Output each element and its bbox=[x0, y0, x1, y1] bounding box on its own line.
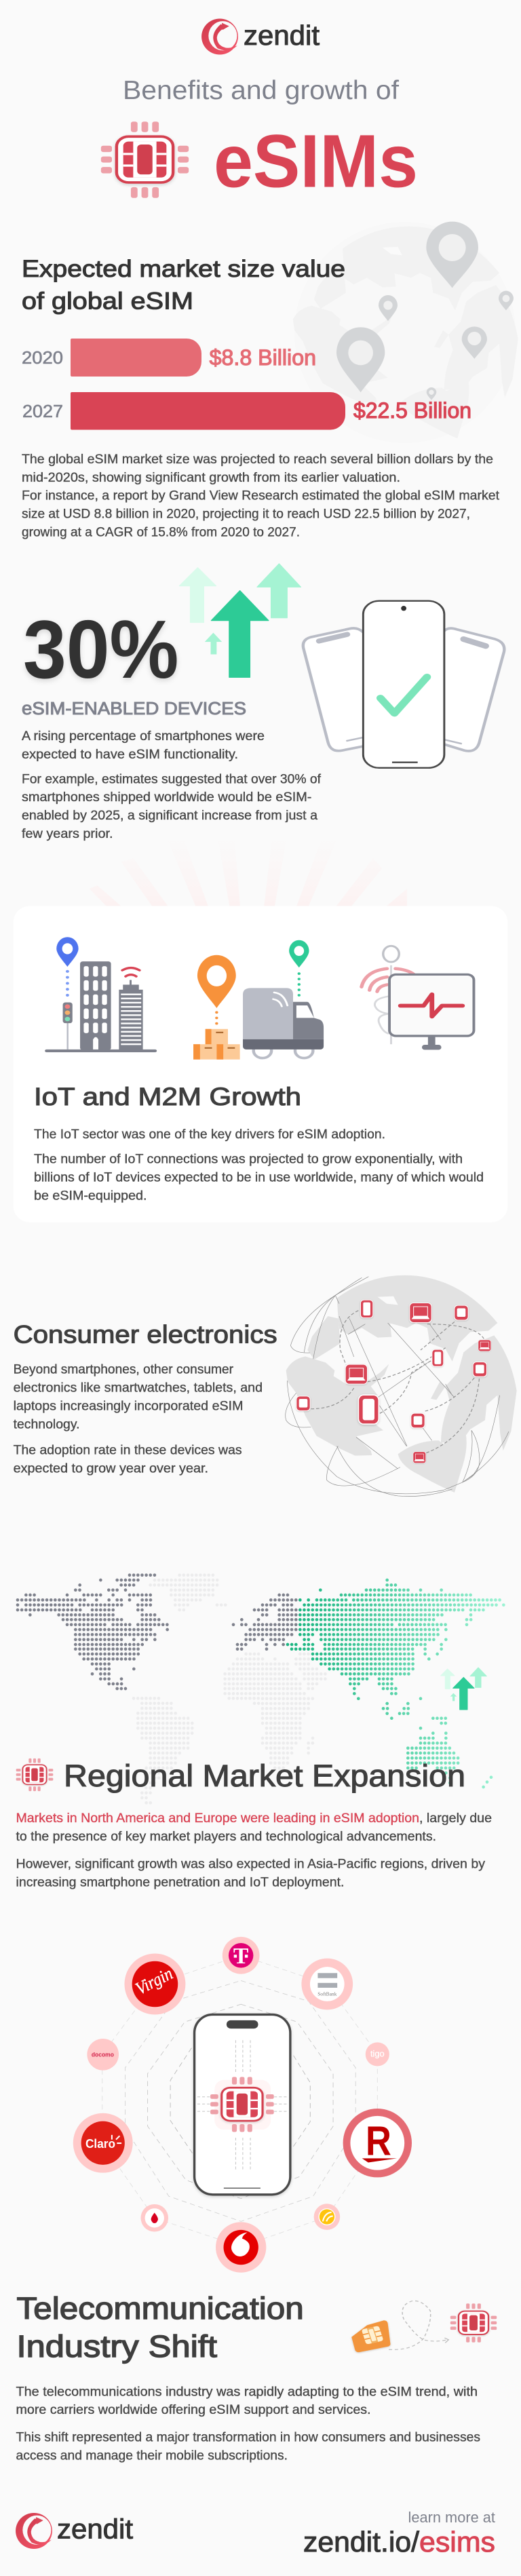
icon: smart city bbox=[45, 937, 157, 1052]
text: market size paragraph: For instance, a report by Grand View Research estimated the global eSIM market bbox=[22, 489, 500, 503]
logo: Vodafone bbox=[216, 2222, 266, 2273]
logo: zendit header bbox=[201, 18, 320, 55]
background globe with location pins bbox=[293, 222, 518, 443]
call to action: learn more: esims bbox=[419, 2526, 495, 2558]
text: devices paragraphs: A rising percentage of smartphones were bbox=[22, 729, 265, 744]
logo: small red drop bbox=[140, 2204, 168, 2232]
bar chart: market size 2020 vs 2027: 2027 bbox=[22, 401, 63, 421]
heading: expected market size: Expected market size value bbox=[22, 256, 345, 282]
text: market size paragraph: mid-2020s, showing significant growth from its earlier valuation. bbox=[22, 471, 400, 485]
heading: regional market expansion: Regional Market Expansion bbox=[64, 1758, 465, 1793]
icon: chip beside regional heading bbox=[16, 1758, 53, 1791]
icon: healthcare monitor bbox=[362, 946, 474, 1050]
logo: Virgin: Virgin bbox=[132, 1963, 176, 1999]
statistic: 30%: 30% bbox=[23, 603, 179, 695]
text: regional paragraphs: to the presence of key market players and technological advancements. bbox=[16, 1830, 436, 1844]
logo: zendit footer bbox=[16, 2513, 134, 2549]
text: consumer electronics paragraphs: laptops increasingly incorporated eSIM bbox=[14, 1399, 243, 1413]
text: devices paragraphs bbox=[22, 729, 322, 841]
logo: SoftBank: SoftBank bbox=[317, 1991, 337, 1997]
bar chart: market size 2020 vs 2027 bbox=[22, 339, 471, 430]
logo: T-Mobile: T bbox=[233, 1944, 249, 1969]
text: IoT paragraphs: The IoT sector was one of the key drivers for eSIM adoption. bbox=[34, 1128, 385, 1142]
text: market size paragraph: growing at a CAGR of 15.8% from 2020 to 2027. bbox=[22, 526, 300, 540]
globe: connected devices bbox=[286, 1275, 517, 1497]
logo: Claro bbox=[73, 2113, 133, 2173]
text: telecom paragraphs: The telecommunications industry was rapidly adapting to the eSIM trend, with bbox=[16, 2385, 478, 2399]
text: telecom paragraphs bbox=[16, 2385, 480, 2463]
logo: Rakuten: R bbox=[366, 2118, 391, 2164]
text: devices paragraphs: For example, estimates suggested that over 30% of bbox=[22, 772, 322, 786]
text: consumer electronics paragraphs: expected to grow year over year. bbox=[14, 1462, 208, 1476]
icon: delivery truck and parcels bbox=[193, 940, 324, 1060]
text: consumer electronics paragraphs: The adoption rate in these devices was bbox=[14, 1444, 242, 1458]
text: consumer electronics paragraphs: Beyond smartphones, other consumer bbox=[14, 1362, 234, 1377]
logo: tigo: tigo bbox=[370, 2048, 385, 2058]
panel: IoT and M2M growth bbox=[14, 906, 507, 1223]
logo: Claro: Claro bbox=[85, 2136, 115, 2151]
text: consumer electronics paragraphs: electronics like smartwatches, tablets, and bbox=[14, 1381, 263, 1395]
logo: Virgin bbox=[124, 1954, 185, 2014]
text: telecom paragraphs: access and manage their mobile subscriptions. bbox=[16, 2449, 288, 2463]
subheading: eSIM-enabled devices: eSIM-ENABLED DEVICES bbox=[22, 699, 246, 718]
text: IoT paragraphs: be eSIM-equipped. bbox=[34, 1189, 147, 1204]
heading: IoT and M2M Growth: IoT and M2M Growth bbox=[34, 1083, 301, 1111]
text: regional paragraphs: However, significant growth was also expected in Asia-Pacific regions, driven by bbox=[16, 1858, 486, 1871]
logo: docomo: docomo bbox=[92, 2051, 115, 2058]
text: market size paragraph: The global eSIM market size was projected to reach several billion dollars by the bbox=[22, 453, 493, 467]
text: devices paragraphs: few years prior. bbox=[22, 827, 113, 841]
heading: consumer electronics: Consumer electronics bbox=[14, 1321, 277, 1349]
heading: telecommunication industry shift: Telecommunication bbox=[16, 2291, 304, 2326]
logo: docomo bbox=[87, 2039, 119, 2071]
phone with chip bbox=[195, 2014, 290, 2195]
logo: Rakuten bbox=[343, 2109, 412, 2177]
heading: telecommunication industry shift bbox=[16, 2291, 304, 2364]
text: consumer electronics paragraphs: technology. bbox=[14, 1417, 80, 1431]
heading: expected market size bbox=[22, 256, 345, 315]
logo: tigo bbox=[366, 2042, 389, 2066]
call to action: learn more bbox=[303, 2509, 495, 2558]
logo: Turkcell bbox=[314, 2204, 340, 2230]
logo: SoftBank bbox=[301, 1959, 353, 2010]
icon: growth arrows on map bbox=[441, 1668, 486, 1710]
icon: chip beside telecom heading bbox=[450, 2303, 497, 2343]
bar chart: market size 2020 vs 2027: 2020 bbox=[22, 347, 63, 368]
text: telecom paragraphs: more carriers worldwide offering eSIM support and services. bbox=[16, 2403, 371, 2417]
icon: three phones with check mark bbox=[303, 601, 504, 768]
icon: SIM card to eSIM bbox=[351, 2301, 448, 2352]
call to action: learn more: zendit.io/ bbox=[303, 2526, 419, 2558]
text: devices paragraphs: expected to have eSIM functionality. bbox=[22, 748, 238, 762]
logo: zendit footer: zendit bbox=[57, 2513, 134, 2544]
text: IoT paragraphs: The number of IoT connections was projected to grow exponentially, with bbox=[34, 1153, 463, 1167]
logo: zendit header: zendit bbox=[244, 20, 320, 51]
text: consumer electronics paragraphs bbox=[14, 1362, 263, 1476]
text: devices paragraphs: enabled by 2025, a significant increase from just a bbox=[22, 809, 317, 823]
text: IoT paragraphs: billions of IoT devices expected to be in use worldwide, many of which would bbox=[34, 1171, 484, 1185]
text: regional paragraphs: , largely due bbox=[419, 1811, 492, 1826]
icon: rising arrows bbox=[179, 564, 301, 677]
bar chart: market size 2020 vs 2027: $22.5 Billion bbox=[353, 398, 471, 423]
text: IoT paragraphs bbox=[34, 1128, 484, 1204]
text: market size paragraph: size at USD 8.8 billion in 2020, projecting it to reach USD 22.5 billion by 2027, bbox=[22, 507, 470, 522]
icon: eSIM chip bbox=[101, 121, 189, 198]
title: eSIMs bbox=[214, 119, 418, 204]
heading: expected market size: of global eSIM bbox=[22, 288, 193, 315]
text: telecom paragraphs: This shift represented a major transformation in how consumers and businesses bbox=[16, 2431, 480, 2445]
logo: T-Mobile bbox=[223, 1937, 260, 1974]
text: regional paragraphs: increasing smartphone penetration and IoT deployment. bbox=[16, 1875, 345, 1889]
diagram: carriers around phone bbox=[73, 1937, 412, 2273]
subtitle: Benefits and growth of bbox=[123, 76, 399, 105]
text: regional paragraphs: Markets in North America and Europe were leading in eSIM adoption bbox=[16, 1811, 419, 1826]
call to action: learn more: learn more at bbox=[408, 2509, 495, 2526]
heading: telecommunication industry shift: Industry Shift bbox=[16, 2329, 218, 2364]
dotted world map bbox=[18, 1575, 503, 1803]
text: market size paragraph bbox=[22, 453, 500, 540]
bar chart: market size 2020 vs 2027: $8.8 Billion bbox=[210, 345, 316, 370]
text: devices paragraphs: smartphones shipped worldwide would be eSIM- bbox=[22, 790, 311, 805]
text: regional paragraphs bbox=[16, 1811, 492, 1889]
